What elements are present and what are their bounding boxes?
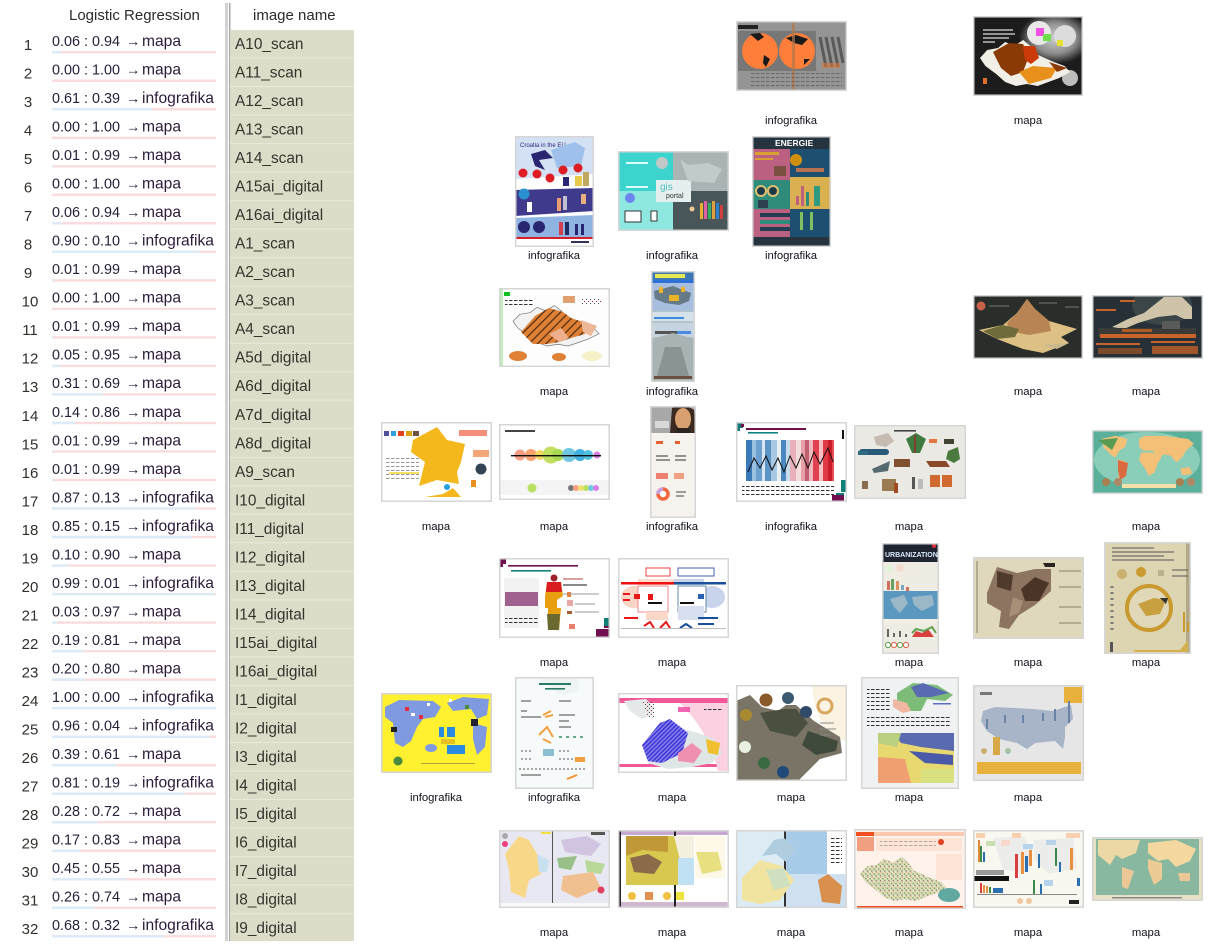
row 31: 31 [22,893,38,910]
image name list: A12_scan [235,93,303,110]
image name list: I5_digital [235,806,297,823]
row 29 [22,832,216,853]
row 7: 0.06 : 0.94 [52,205,120,221]
thumbnail: atlas spread 1 [499,830,610,908]
row 30: 0.45 : 0.55 [52,861,120,877]
row 2 [24,62,216,82]
row 9: 0.01 : 0.99 [52,262,120,278]
thumbnail: human body infographic [499,558,610,638]
thumbnail: teal world map [1092,430,1203,494]
image name list: I8_digital [235,892,297,909]
image name list: A15ai_digital [235,179,323,196]
row 23: 23 [22,664,38,681]
row 21 [22,603,216,624]
label: infografika [765,250,818,262]
row 25: 25 [22,722,38,738]
row 1: 0.06 : 0.94 [52,34,120,50]
row 16: mapa [142,461,181,478]
row 4: → [126,120,140,136]
image name list: A13_scan [235,122,303,139]
image name list: I14_digital [235,606,305,623]
thumbnail: old world atlas map [1092,837,1203,901]
row 1: 1 [24,37,32,54]
row 8: 8 [24,237,32,254]
label: mapa [1014,386,1043,398]
row 12: → [126,348,140,364]
image name list: A16ai_digital [235,207,323,224]
row 18: 0.85 : 0.15 [52,519,120,535]
row 18: 18 [22,522,38,539]
label: mapa [540,927,569,939]
row 19: 19 [22,550,38,567]
row 28 [22,803,216,824]
row 6: → [126,177,140,193]
row 9: 9 [24,265,32,282]
label: mapa [1014,657,1043,669]
row 2: → [126,62,140,78]
thumbnail: Energie infographic [752,136,831,247]
label: mapa [422,521,451,533]
row 22: mapa [142,632,181,649]
image name list: I4_digital [235,778,297,794]
row 12: 0.05 : 0.95 [52,348,120,364]
row 17: → [126,490,140,506]
image name list [230,36,354,937]
row 30: mapa [142,860,181,877]
image name list: A11_scan [235,64,302,82]
row 4 [24,119,216,140]
row 5: mapa [142,147,181,164]
row 28: 28 [22,807,38,824]
thumbnail: bubble timeline [499,424,610,500]
row 11: → [126,319,140,335]
row 30 [22,860,216,881]
label: mapa [1132,927,1161,939]
image name list: A8d_digital [235,435,311,452]
row 22: 0.19 : 0.81 [52,633,120,649]
thumbnail: France map [381,422,492,502]
row 15: 15 [22,436,38,453]
row 10 [22,290,216,311]
label: infografika [646,250,699,262]
row 12 [22,347,216,368]
row 14: 14 [22,408,38,425]
row 7: → [126,205,140,221]
image name list: A3_scan [235,293,295,310]
thumbnail: Croatia in the EU infographic: Croatia in the EU [520,143,566,149]
row 25: 0.96 : 0.04 [52,718,120,734]
thumbnail: world hemispheres infographic [736,21,847,91]
row 21: 0.03 : 0.97 [52,604,120,620]
row 28: → [126,804,140,820]
row 26: 26 [22,750,38,767]
image name list: A9_scan [235,464,295,481]
label: mapa [1014,115,1043,127]
row 5: 5 [24,151,32,168]
row 23: mapa [142,660,181,677]
image name list: A2_scan [235,264,295,281]
table header: image name: image name [253,7,336,24]
label: mapa [895,657,924,669]
thumbnail: Czech map on dark background [973,16,1083,96]
image name list: A4_scan [235,321,295,338]
row 8: 0.90 : 0.10 [52,234,120,250]
row 20: → [126,576,140,592]
row 15: 0.01 : 0.99 [52,433,120,449]
row 6 [24,176,216,197]
row 23: 0.20 : 0.80 [52,661,120,677]
thumbnail: pink hatched map [618,693,729,773]
row 21: → [126,604,140,620]
row 4: mapa [142,119,181,136]
image name list: I9_digital [235,920,297,937]
image name column background [230,30,354,941]
label: mapa [1132,521,1161,533]
row 9 [24,261,216,282]
thumbnail: atlas spread 3 [736,830,847,908]
row 19 [22,546,216,567]
thumbnail: gis portal infographic: portal [666,193,684,200]
label: mapa [1132,386,1161,398]
row 32: 32 [22,921,38,938]
row 23: → [126,661,140,677]
row 16: → [126,462,140,478]
row 27: infografika [142,774,214,792]
row 20: infografika [142,575,214,592]
image name list: A5d_digital [235,350,311,367]
row 13 [22,375,216,396]
row 2: mapa [142,62,181,78]
row 12: 12 [22,351,38,368]
image name list: I3_digital [235,749,297,766]
image name list: A1_scan [235,236,295,253]
row 20: 0.99 : 0.01 [52,576,120,592]
row 3: 3 [24,94,32,111]
row 3 [24,90,216,111]
row 21: 21 [22,607,38,624]
thumbnail: gis portal infographic: gis [660,182,673,193]
image name list: A14_scan [235,150,303,167]
row 24: 24 [22,693,38,710]
image name list: I15ai_digital [235,635,317,652]
row 17: 0.87 : 0.13 [52,490,120,506]
row 14: → [126,405,140,421]
image name list: I1_digital [235,692,297,709]
label: mapa [895,927,924,939]
row 6: 0.00 : 1.00 [52,177,120,193]
thumbnail: yellow world infographic [381,693,492,773]
row 17 [22,489,216,510]
row 27: 27 [22,778,38,796]
row 29: 29 [22,836,38,853]
label: infografika [410,792,463,804]
row 24: infografika [142,689,214,706]
label: mapa [1132,657,1161,669]
label: mapa [540,657,569,669]
row 1: mapa [142,33,181,50]
row 27: → [126,776,140,792]
image name list: I10_digital [235,492,305,509]
label: infografika [528,250,581,262]
row 10: → [126,291,140,307]
row 16: 0.01 : 0.99 [52,462,120,478]
image name list: A6d_digital [235,378,311,395]
row 16: 16 [22,465,38,482]
row 27: 0.81 : 0.19 [52,776,120,792]
row 32 [22,917,216,938]
row 11 [22,318,216,339]
image name list: I11_digital [235,521,304,538]
row 3: infografika [142,90,214,107]
row 30: 30 [22,864,38,881]
row 11: 11 [22,322,38,339]
label: infografika [646,386,699,398]
row 6: mapa [142,176,181,193]
image name list: I12_digital [235,549,305,566]
row 7: mapa [142,204,181,221]
row 25: → [126,718,140,734]
row 13: → [126,376,140,392]
row 2: 0.00 : 1.00 [52,62,120,78]
row 11: 0.01 : 0.99 [52,319,120,335]
row 28: mapa [142,803,181,820]
row 8: infografika [142,233,214,250]
row 3: 0.61 : 0.39 [52,91,120,107]
row 14 [22,404,216,425]
image name list: I7_digital [235,863,297,880]
thumbnail: steam train infographic [1092,295,1203,359]
row 30: → [126,861,140,877]
row 32: → [126,918,140,934]
label: mapa [895,521,924,533]
row 5 [24,147,216,168]
image name list: I16ai_digital [235,663,317,680]
row 21: mapa [142,603,181,620]
image name list: A7d_digital [235,407,311,424]
row 4: 0.00 : 1.00 [52,120,120,136]
row 15: → [126,433,140,449]
row 26: → [126,747,140,763]
row 25 [22,718,216,738]
row 19: 0.10 : 0.90 [52,547,120,563]
row 23 [22,660,216,681]
row 8: → [126,234,140,250]
row 14: 0.14 : 0.86 [52,405,120,421]
row 24: 1.00 : 0.00 [52,690,120,706]
label: infografika [765,521,818,533]
row 29: mapa [142,832,181,849]
row 9: mapa [142,261,181,278]
thumbnail: Energie infographic: ENERGIE [775,138,814,148]
thumbnail: atlas spread 2 [618,830,729,908]
thumbnail: portrait infographic with woman [650,406,696,518]
thumbnail: satellite country map [736,685,847,781]
row 9: → [126,262,140,278]
row 10: 0.00 : 1.00 [52,291,120,307]
row 15: mapa [142,432,181,449]
row 17: 17 [22,493,38,510]
row 11: mapa [142,318,181,335]
label: mapa [658,792,687,804]
row 19: mapa [142,546,181,563]
thumbnail: sepia circular map [1104,542,1191,654]
label: infografika [765,115,818,127]
row 31: mapa [142,889,181,906]
image name list: I2_digital [235,720,297,738]
label: mapa [777,792,806,804]
image name list: I13_digital [235,578,305,595]
thumbnail: bar charts on world map [973,830,1084,908]
row 7: 7 [24,208,32,225]
thumbnail: climate maps on page [861,677,959,789]
thumbnail: orange Czech map [499,288,610,367]
row 22: → [126,633,140,649]
row 20: 20 [22,579,38,596]
row 1 [24,33,216,54]
row 26: mapa [142,746,181,763]
row 29: 0.17 : 0.83 [52,833,120,849]
prediction rows [22,33,216,938]
vertical column divider [225,3,230,941]
row 26 [22,746,216,767]
row 31: 0.26 : 0.74 [52,890,120,906]
row 19: → [126,547,140,563]
row 16 [22,461,216,482]
thumbnail: Urbanization infographic: URBANIZATION [885,552,938,559]
label: mapa [540,386,569,398]
label: mapa [658,657,687,669]
row 15 [22,432,216,453]
label: mapa [1014,927,1043,939]
row 4: 4 [24,123,32,140]
row 18 [22,518,216,539]
row 28: 0.28 : 0.72 [52,804,120,820]
row 22: 22 [22,636,38,653]
label: mapa [777,927,806,939]
row 8 [24,233,216,254]
thumbnail: brown vintage choropleth [973,557,1084,639]
row 10: mapa [142,290,181,307]
row 24 [22,689,216,710]
row 31: → [126,890,140,906]
row 13: mapa [142,375,181,392]
row 5: 0.01 : 0.99 [52,148,120,164]
thumbnail: mountain island illustration [973,295,1083,359]
table header: Logistic Regression: Logistic Regression [69,7,200,24]
thumbnail: Urbanization infographic [882,543,939,654]
thumbnail: coffee process infographic [854,425,966,499]
label: mapa [540,521,569,533]
row 26: 0.39 : 0.61 [52,747,120,763]
label: mapa [895,792,924,804]
thumbnail: climate stripes chart [736,422,847,502]
thumbnail: Czech orange school map [854,829,966,909]
row 27 [22,774,216,796]
row 5: → [126,148,140,164]
row 10: 10 [22,294,38,311]
row 17: infografika [142,489,214,506]
row 32: infografika [142,917,214,934]
row 3: → [126,91,140,107]
row 18: infografika [142,518,214,535]
thumbnail: gis portal infographic [618,151,729,231]
row 25: infografika [142,718,214,734]
row 13: 0.31 : 0.69 [52,376,120,392]
label: mapa [1014,792,1043,804]
row 31 [22,889,216,910]
label: mapa [658,927,687,939]
row 13: 13 [22,379,38,396]
thumbnail: red and blue comparison [618,558,729,638]
thumbnail: USA spike map [973,685,1084,781]
row 1: → [126,34,140,50]
row 14: mapa [142,404,181,421]
thumbnail: pale white infographic [515,677,594,789]
image name list: A10_scan [235,36,303,53]
row 20 [22,575,216,596]
row 12: mapa [142,347,181,364]
row 29: → [126,833,140,849]
row 22 [22,632,216,653]
thumbnail: Croatia in the EU infographic [515,136,594,247]
label: infografika [528,792,581,804]
thumbnail: tall blue-grey infographic [651,271,695,382]
row 6: 6 [24,180,32,197]
row 18: → [126,519,140,535]
label: infografika [646,521,699,533]
image name list: I6_digital [235,835,297,852]
row 24: → [126,690,140,706]
row 7 [24,204,216,225]
row 2: 2 [24,66,32,82]
row 32: 0.68 : 0.32 [52,918,120,934]
